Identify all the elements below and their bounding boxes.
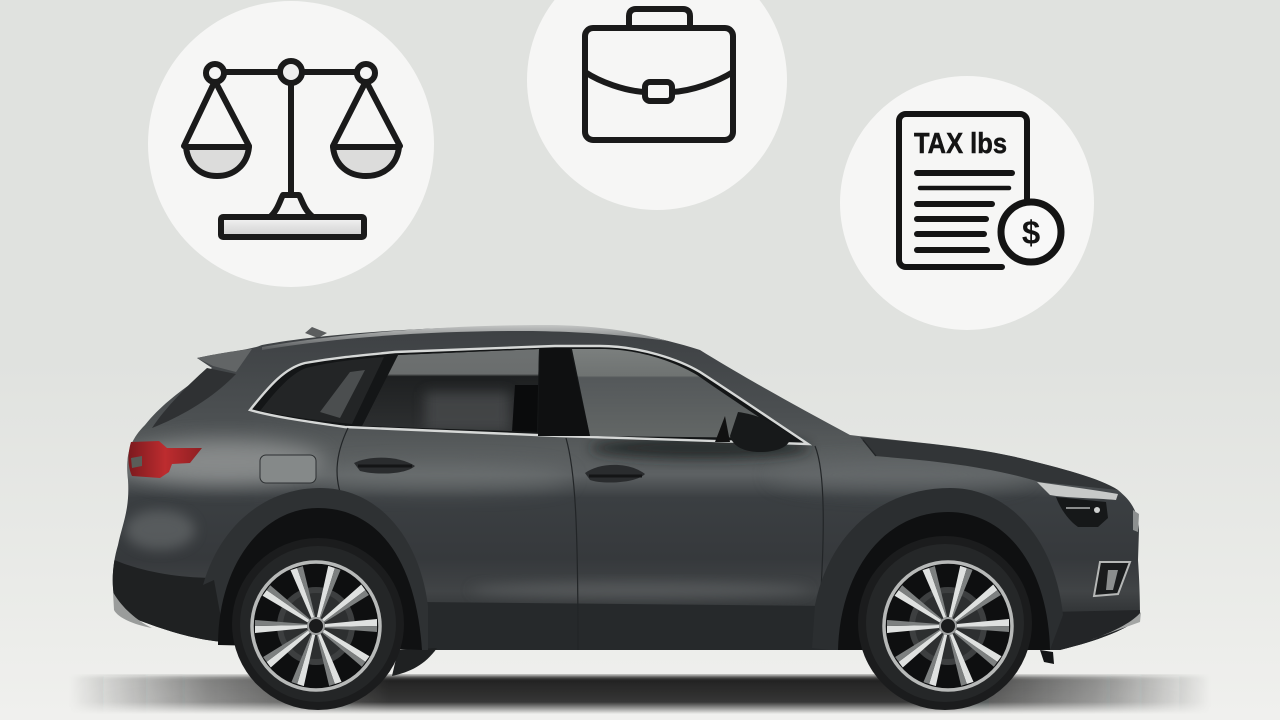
rear door handle bbox=[354, 458, 415, 474]
rear bumper bbox=[112, 560, 220, 642]
front skid bbox=[1090, 612, 1141, 640]
tax label: TAX lbs bbox=[914, 128, 1007, 160]
body shading bbox=[110, 437, 1142, 652]
icon circle: tax document bbox=[840, 76, 1094, 330]
front wheel arch bbox=[812, 488, 1063, 650]
mirror bbox=[730, 412, 790, 452]
icon: dollar coin: $ bbox=[1022, 214, 1040, 251]
rear wheel arch bbox=[203, 488, 428, 650]
b-pillar bbox=[538, 348, 590, 436]
front lower bumper bbox=[1056, 610, 1140, 650]
front grille edge bbox=[1133, 510, 1139, 532]
headlight bbox=[1037, 482, 1118, 527]
rear wheel bbox=[232, 538, 404, 710]
front door window bbox=[572, 349, 790, 438]
rear skid bbox=[113, 592, 152, 628]
rear door window bbox=[362, 349, 540, 432]
fog light bbox=[1094, 562, 1130, 596]
front wheel bbox=[858, 536, 1032, 710]
ground shadow bbox=[78, 674, 1202, 714]
car bbox=[110, 325, 1142, 710]
front mud flap bbox=[1040, 650, 1054, 664]
roof antenna bbox=[305, 327, 327, 338]
icon: briefcase bbox=[585, 9, 733, 140]
car body bbox=[113, 326, 1140, 650]
icon: dollar coin bbox=[1001, 202, 1061, 262]
icon circle: briefcase bbox=[527, 0, 787, 210]
window frame bbox=[250, 346, 808, 444]
fuel door bbox=[260, 455, 316, 483]
icon circle: scales of justice bbox=[148, 1, 434, 287]
front door handle bbox=[585, 465, 645, 482]
icon: tax document bbox=[899, 114, 1061, 267]
roof rail highlight bbox=[262, 325, 668, 350]
quarter window bbox=[260, 357, 384, 424]
inner rear tyre bbox=[392, 648, 437, 676]
tail light bbox=[128, 441, 202, 478]
icon: scales of justice bbox=[184, 61, 400, 237]
spoiler bbox=[197, 349, 252, 372]
rear windscreen edge bbox=[152, 368, 236, 428]
lower rocker cladding bbox=[428, 602, 815, 618]
door shut lines bbox=[337, 428, 876, 650]
